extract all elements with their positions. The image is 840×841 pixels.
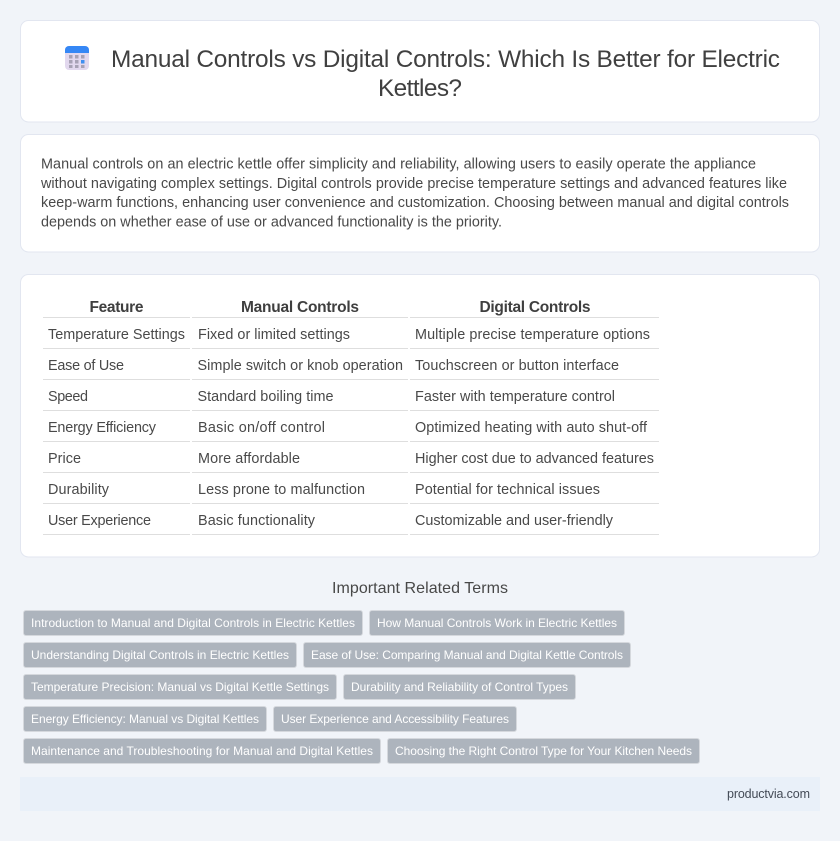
row: price: Higher cost due to advanced features xyxy=(415,451,654,467)
text block: introduction: depends on whether ease of use or advanced functionality is the priority. xyxy=(41,214,502,230)
row: temperature settings: Multiple precise temperature options xyxy=(415,327,650,343)
row: durability: Durability xyxy=(48,482,110,498)
row: user experience: Customizable and user-friendly xyxy=(415,513,614,529)
row: temperature settings xyxy=(48,327,650,343)
tag: ease of use xyxy=(304,642,630,668)
tag: user experience: User Experience and Accessibility Features xyxy=(281,712,509,726)
row: speed xyxy=(48,389,615,405)
tag: user experience xyxy=(274,706,516,732)
tag: understanding digital controls xyxy=(24,642,296,668)
row: price xyxy=(48,451,654,467)
tag: durability xyxy=(344,674,576,700)
table header xyxy=(90,299,590,316)
table header: Digital Controls xyxy=(480,299,590,316)
tag: introduction: Introduction to Manual and Digital Controls in Electric Kettles xyxy=(31,616,355,630)
row: energy efficiency: Energy Efficiency xyxy=(48,420,157,436)
row: temperature settings: Fixed or limited settings xyxy=(198,327,350,343)
tag: energy efficiency xyxy=(24,706,266,732)
row: durability: Potential for technical issues xyxy=(415,482,600,498)
tag: choosing control type xyxy=(388,738,700,764)
title: Kettles? xyxy=(378,75,462,102)
tag: how manual controls work xyxy=(370,610,624,636)
panel: title header xyxy=(20,20,820,122)
row: price: More affordable xyxy=(198,451,300,467)
title: Manual Controls vs Digital Controls: Which Is Better for Electric xyxy=(111,46,780,73)
row: ease of use: Simple switch or knob operation xyxy=(198,358,403,374)
related term tags xyxy=(24,610,700,764)
row: speed: Faster with temperature control xyxy=(415,389,615,405)
table header: Feature xyxy=(90,299,144,316)
tag: temperature precision xyxy=(24,674,336,700)
tag: how manual controls work: How Manual Controls Work in Electric Kettles xyxy=(377,616,617,630)
row: energy efficiency: Basic on/off control xyxy=(198,420,325,436)
tag: maintenance xyxy=(24,738,380,764)
row: durability: Less prone to malfunction xyxy=(198,482,365,498)
tag: choosing control type: Choosing the Right Control Type for Your Kitchen Needs xyxy=(395,744,692,758)
footer source text: productvia.com xyxy=(727,787,810,801)
heading: important related terms: Important Related Terms xyxy=(332,580,508,597)
row: ease of use xyxy=(48,358,619,374)
panel: introduction text xyxy=(20,134,820,252)
tag: durability: Durability and Reliability of Control Types xyxy=(351,680,568,694)
panel: comparison table xyxy=(20,274,820,557)
row: speed: Speed xyxy=(48,389,88,405)
row: user experience xyxy=(48,513,614,529)
tag: ease of use: Ease of Use: Comparing Manual and Digital Kettle Controls xyxy=(311,648,623,662)
row: energy efficiency xyxy=(48,420,648,436)
row: user experience: User Experience xyxy=(48,513,151,529)
row: durability xyxy=(48,482,600,498)
table grid lines xyxy=(43,317,659,535)
row: user experience: Basic functionality xyxy=(198,513,316,529)
tag: temperature precision: Temperature Precision: Manual vs Digital Kettle Settings xyxy=(31,680,329,694)
title xyxy=(111,46,780,102)
tag: understanding digital controls: Understanding Digital Controls in Electric Kettles xyxy=(31,648,289,662)
icon: calendar xyxy=(65,46,89,70)
row: ease of use: Touchscreen or button interface xyxy=(415,358,619,374)
text block: introduction xyxy=(40,156,789,230)
tag: introduction xyxy=(24,610,362,636)
row: ease of use: Ease of Use xyxy=(48,358,124,374)
text block: introduction: Manual controls on an electric kettle offer simplicity and reliability, allowing users to easily operate the appliance xyxy=(41,156,756,172)
table header: Manual Controls xyxy=(241,299,359,316)
row: energy efficiency: Optimized heating with auto shut-off xyxy=(415,420,648,436)
row: price: Price xyxy=(48,451,81,467)
footer xyxy=(20,777,820,811)
tag: energy efficiency: Energy Efficiency: Manual vs Digital Kettles xyxy=(31,712,259,726)
tag: maintenance: Maintenance and Troubleshooting for Manual and Digital Kettles xyxy=(31,744,373,758)
text block: introduction: keep-warm functions, enhancing user convenience and customization. Choosing between manual and digital controls xyxy=(41,195,789,211)
row: speed: Standard boiling time xyxy=(198,389,334,405)
row: temperature settings: Temperature Settings xyxy=(48,327,185,343)
text block: introduction: without navigating complex settings. Digital controls provide precise temperature settings and advanced features like xyxy=(40,176,787,192)
